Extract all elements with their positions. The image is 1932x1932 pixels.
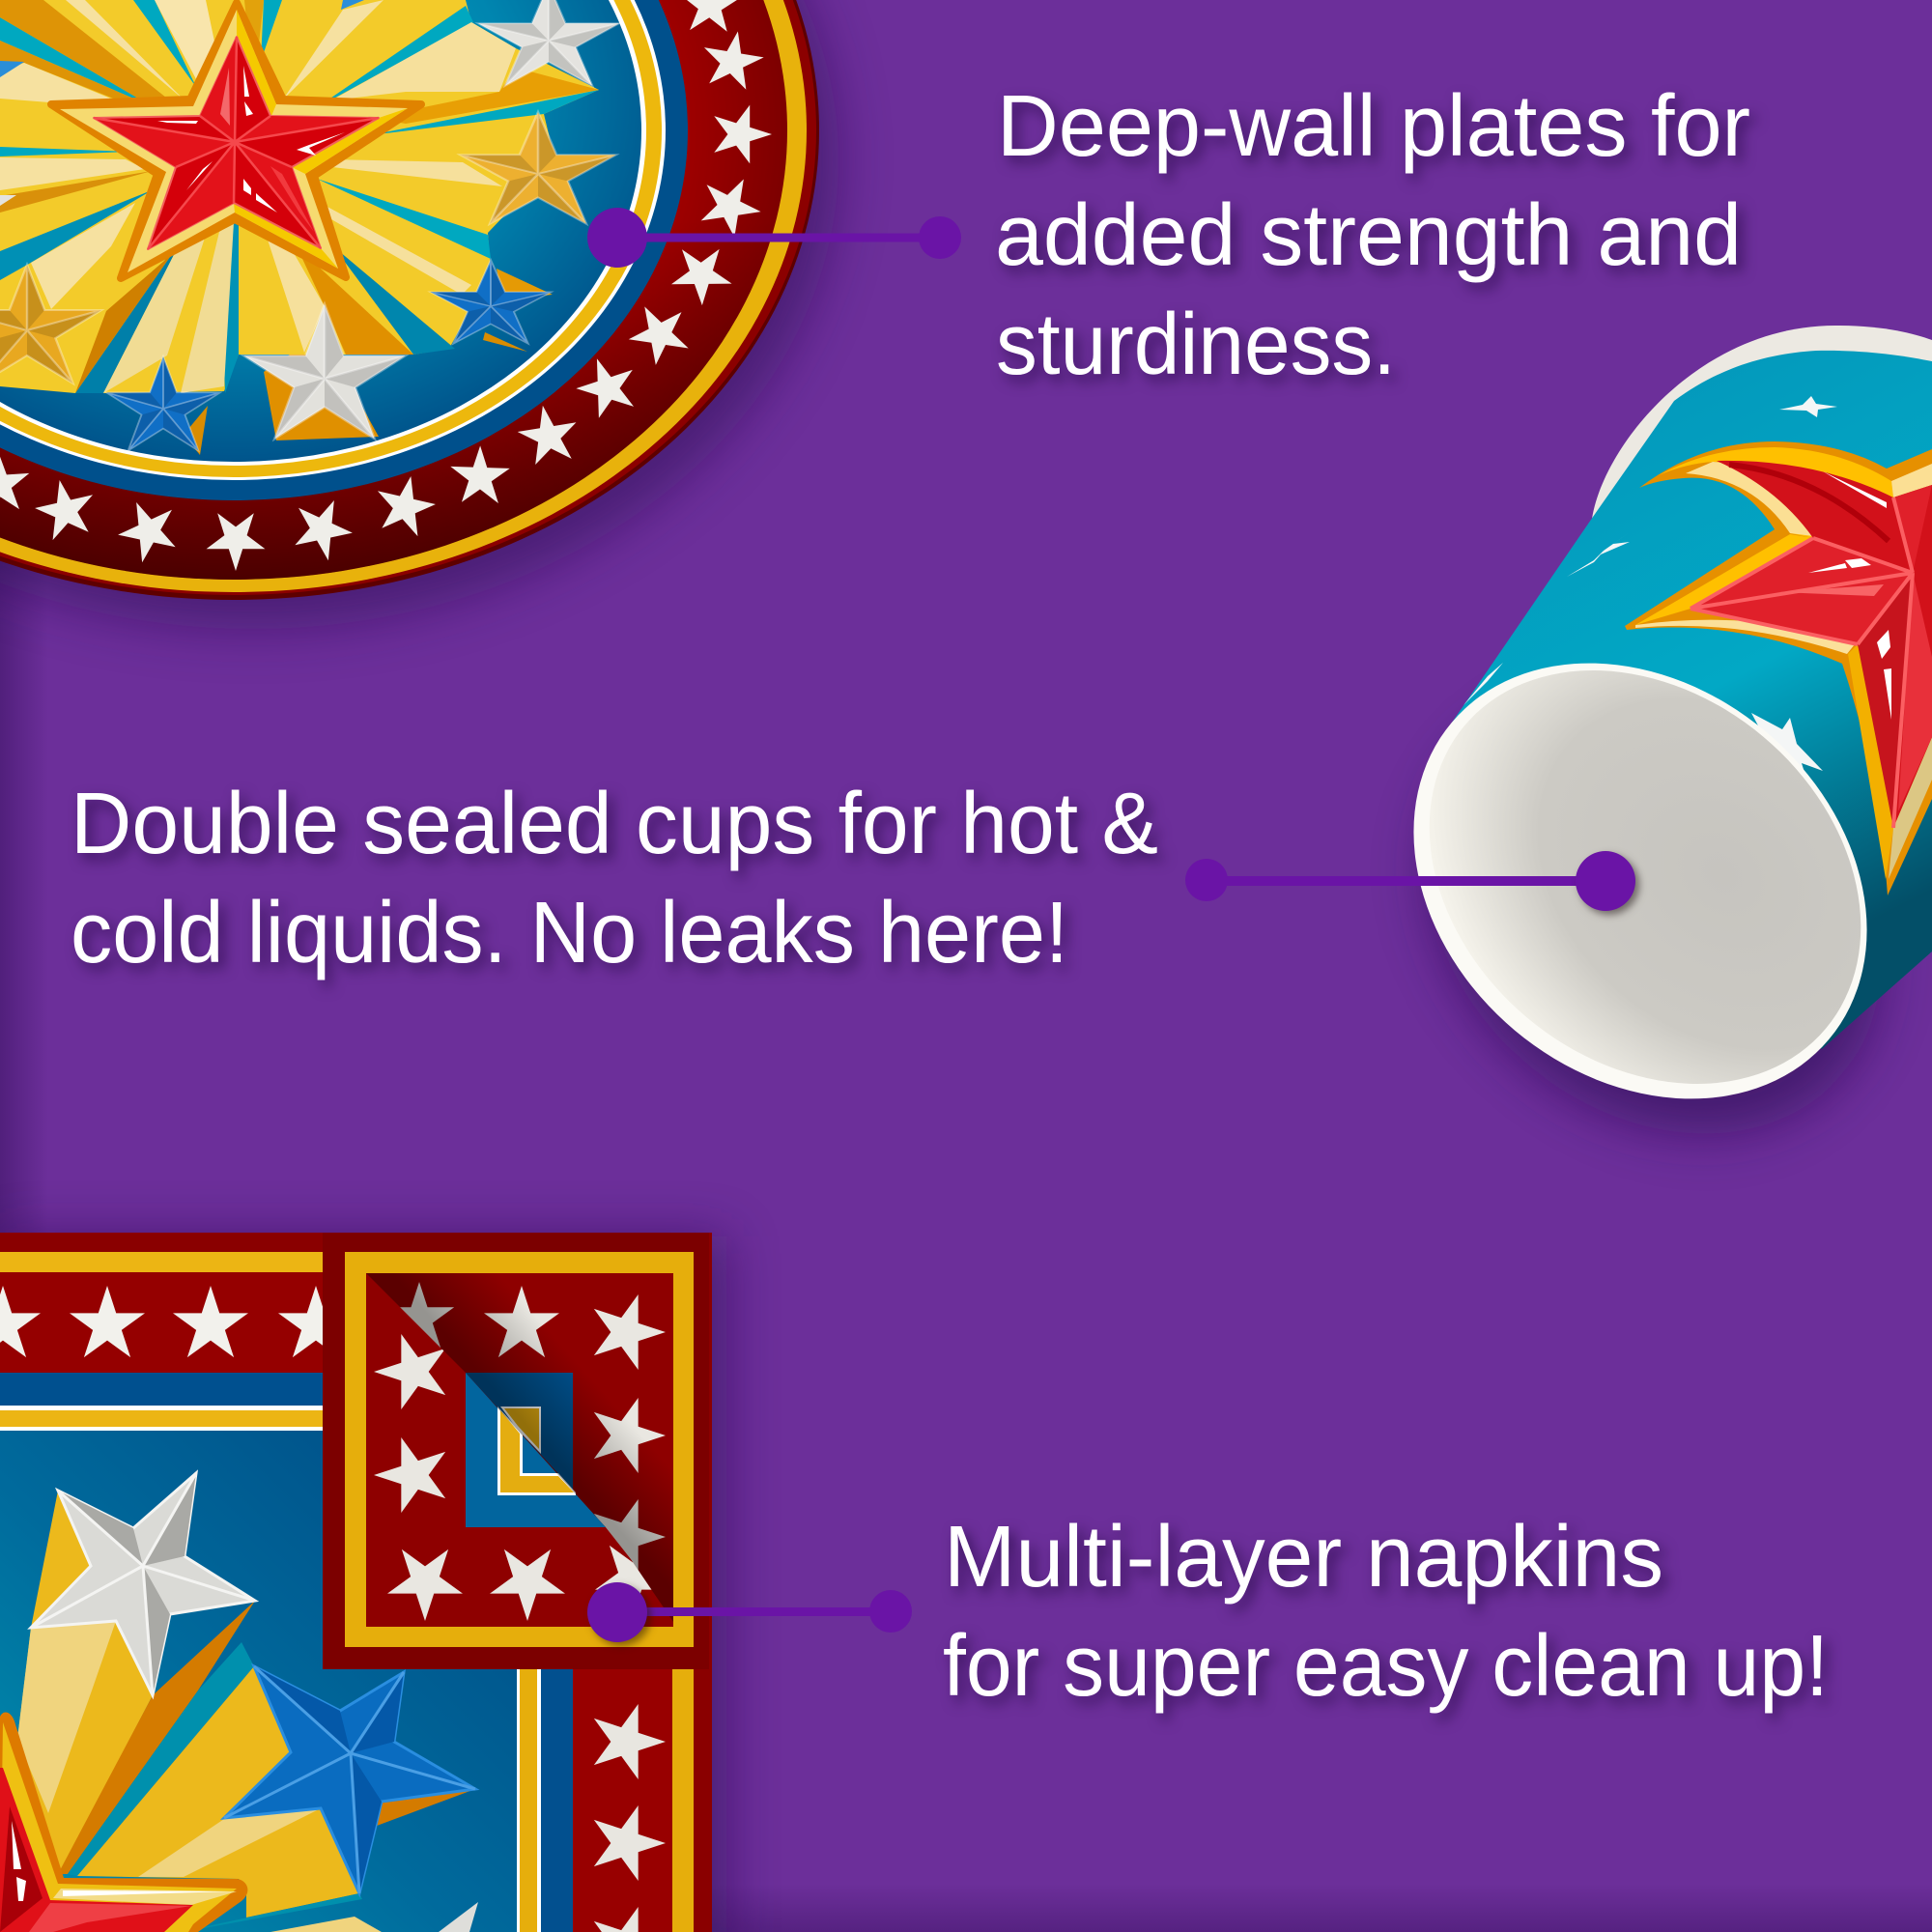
text: plates: added strength and bbox=[995, 187, 1742, 284]
plate rings bbox=[0, 0, 819, 600]
flap centre square bbox=[466, 1373, 606, 1527]
plate rim stars bbox=[0, 0, 772, 571]
callout: cup pointer bbox=[1185, 851, 1635, 911]
flap base bbox=[323, 1233, 709, 1669]
flap underlying stars bbox=[384, 1282, 666, 1575]
napkin sun rays bbox=[17, 1491, 478, 1932]
flap folded-layer stars bbox=[374, 1334, 670, 1621]
cup red star bbox=[1625, 441, 1932, 895]
napkin large stars bbox=[31, 1473, 475, 1893]
text: cups: cold liquids. No leaks here! bbox=[71, 885, 1068, 981]
napkin red star bbox=[0, 1712, 247, 1932]
plate shadow bbox=[0, 0, 838, 629]
text: plates: Deep-wall plates for bbox=[997, 78, 1750, 175]
plate red star bbox=[51, 3, 421, 278]
cup small stars bbox=[1463, 396, 1837, 784]
flap fold shading bbox=[366, 1273, 673, 1627]
cup shadow bbox=[1340, 608, 1932, 1224]
napkin base bbox=[0, 1233, 712, 1932]
panel: cup bbox=[1326, 326, 1932, 1224]
text: plates: sturdiness. bbox=[996, 297, 1396, 393]
napkin band stars bbox=[0, 1286, 354, 1357]
napkin shadow bbox=[0, 1236, 726, 1932]
text: cups: Double sealed cups for hot & bbox=[71, 776, 1158, 872]
panel: plate bbox=[0, 0, 838, 629]
cream and orange ray faces bbox=[0, 0, 171, 106]
callout: plate pointer bbox=[587, 208, 961, 268]
text: napkins: for super easy clean up! bbox=[943, 1618, 1829, 1715]
callout: napkin pointer bbox=[587, 1582, 912, 1642]
panel: napkin bbox=[0, 1233, 726, 1932]
plate sun rays bbox=[0, 0, 599, 455]
text: napkins: Multi-layer napkins bbox=[944, 1509, 1663, 1605]
teal gaps bbox=[0, 0, 599, 393]
plate small stars bbox=[0, 0, 619, 451]
napkin column stars bbox=[594, 1704, 666, 1932]
cup rim bbox=[1592, 326, 1932, 541]
napkin folded flap bbox=[323, 1233, 709, 1669]
cup body bbox=[1452, 351, 1932, 1049]
cup base bbox=[1326, 573, 1932, 1189]
